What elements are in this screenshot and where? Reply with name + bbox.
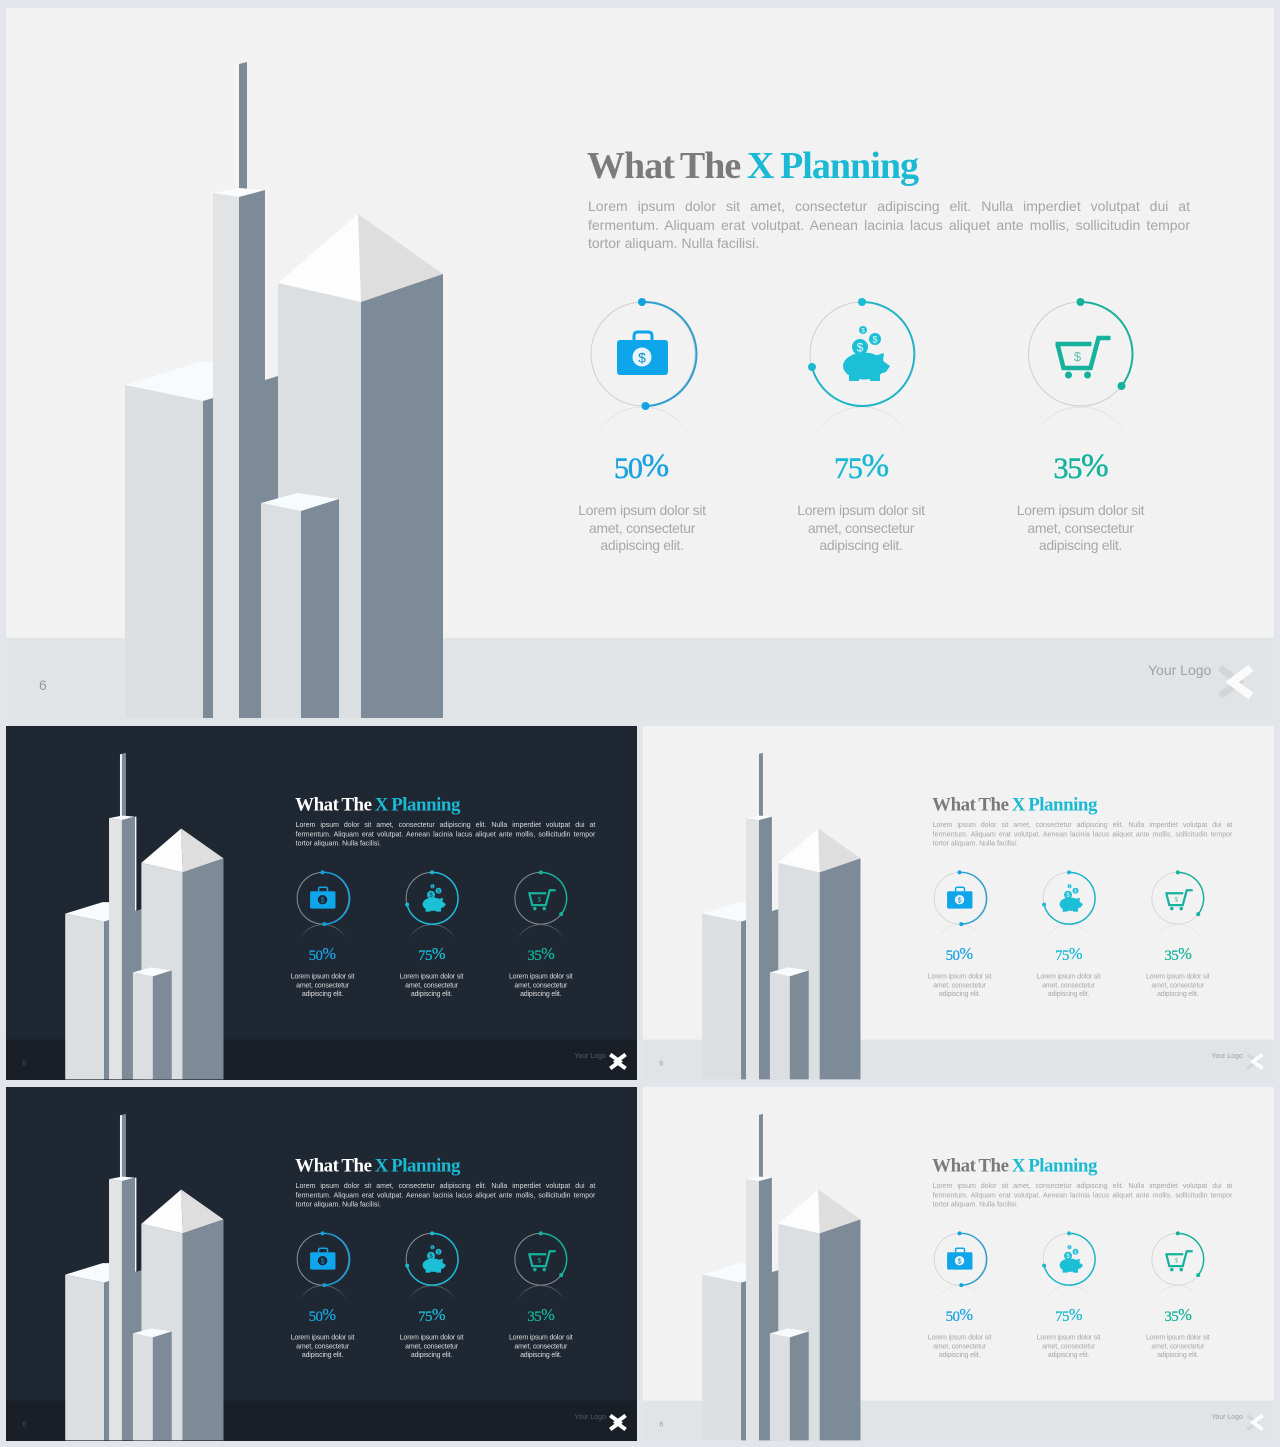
icon: piggy bank: $ [437, 1249, 440, 1254]
metric: 50% savings: 50% [309, 945, 335, 963]
metric: 35% savings: amet, consectetur [1151, 1342, 1204, 1350]
intro text: tortor aliquam. Nulla facilisi. [296, 1200, 381, 1208]
metric: 35% savings: amet, consectetur [1151, 981, 1204, 989]
metric: 75% savings: adipiscing elit. [1048, 1350, 1089, 1358]
icon: piggy bank [1060, 884, 1083, 912]
metric: 50% savings: amet, consectetur [296, 981, 349, 989]
icon: briefcase: $ [638, 350, 646, 366]
title: What The X Planning [932, 1155, 1097, 1176]
intro text [932, 821, 1232, 847]
illustration: skyscrapers [125, 62, 443, 718]
icon: shopping cart [1055, 338, 1110, 378]
page number: 6 [22, 1059, 26, 1067]
metric: 35% savings: amet, consectetur [514, 981, 567, 989]
logo text: Your Logo [1211, 1412, 1243, 1420]
metric: 75% savings: 75% [1055, 1306, 1082, 1324]
metric: 50% savings: adipiscing elit. [302, 1350, 343, 1358]
icon: shopping cart: $ [1174, 1258, 1178, 1265]
intro text [296, 821, 596, 847]
metric: 75% savings: adipiscing elit. [819, 537, 903, 553]
metric: 35% savings: adipiscing elit. [1039, 537, 1122, 553]
icon: piggy bank: $ [1069, 885, 1071, 889]
metric: 75% savings: 75% [1055, 945, 1082, 963]
page number: 6 [22, 1420, 26, 1428]
icon: briefcase: $ [321, 897, 325, 904]
icon: briefcase: $ [321, 1258, 325, 1265]
metric: 50% savings: amet, consectetur [296, 1342, 349, 1350]
logo mark [609, 1052, 627, 1070]
logo text: Your Logo [1211, 1051, 1243, 1059]
metric: 75% savings: amet, consectetur [1042, 981, 1095, 989]
intro text: tortor aliquam. Nulla facilisi. [933, 1200, 1018, 1208]
metric: 75% savings: adipiscing elit. [1048, 989, 1089, 997]
metric: 35% savings: amet, consectetur [1027, 520, 1134, 536]
metric: 75% savings [797, 298, 925, 553]
metric: 50% savings: amet, consectetur [933, 1342, 986, 1350]
icon: piggy bank: $ [1066, 1254, 1070, 1260]
icon: piggy bank: $ [857, 340, 864, 354]
metric: 50% savings: 50% [946, 1306, 972, 1324]
logo mark [1246, 1414, 1264, 1431]
metric: 75% savings [1037, 1231, 1100, 1358]
icon: piggy bank [423, 884, 446, 912]
intro text: fermentum. Aliquam erat volutpat. Aenean lacinia lacus aliquet ante mollis, sollicitudin tempor [933, 1191, 1232, 1199]
metric: 50% savings: adipiscing elit. [939, 989, 980, 997]
illustration: skyscrapers [65, 752, 224, 1080]
title: What The X Planning [932, 794, 1097, 815]
slide: small light top [643, 726, 1274, 1080]
icon: piggy bank [1060, 1245, 1083, 1273]
icon: shopping cart: $ [1073, 349, 1081, 364]
logo text: Your Logo [574, 1412, 606, 1420]
intro text: fermentum. Aliquam erat volutpat. Aenean lacinia lacus aliquet ante mollis, sollicitudin tempor [933, 830, 1232, 838]
metric: 75% savings: Lorem ipsum dolor sit [797, 502, 925, 518]
slide: small light bottom [643, 1087, 1274, 1441]
intro text [932, 1182, 1232, 1208]
icon: piggy bank: $ [437, 888, 440, 893]
intro text: tortor aliquam. Nulla facilisi. [296, 839, 381, 847]
intro text: Lorem ipsum dolor sit amet, consectetur adipiscing elit. Nulla imperdiet volutpat dui at [933, 821, 1232, 829]
icon: piggy bank: $ [1074, 1249, 1077, 1254]
metric: 75% savings: Lorem ipsum dolor sit [1037, 972, 1100, 980]
icon: shopping cart: $ [537, 897, 541, 904]
metric: 50% savings [578, 298, 706, 553]
logo text: Your Logo [574, 1051, 606, 1059]
metric: 35% savings: 35% [527, 945, 554, 963]
icon: briefcase [617, 332, 668, 375]
metric: 50% savings: amet, consectetur [933, 981, 986, 989]
metric: 35% savings [1146, 1231, 1210, 1358]
metric: 35% savings [509, 1231, 573, 1358]
slide: small dark top [6, 726, 637, 1080]
logo mark [1218, 665, 1254, 699]
metric: 35% savings: 35% [1164, 945, 1191, 963]
title: What The X Planning [295, 1155, 460, 1176]
metric: 75% savings: adipiscing elit. [411, 989, 452, 997]
metric: 50% savings: adipiscing elit. [302, 989, 343, 997]
metric: 50% savings: Lorem ipsum dolor sit [928, 972, 991, 980]
intro text: tortor aliquam. Nulla facilisi. [933, 839, 1018, 847]
intro text: Lorem ipsum dolor sit amet, consectetur adipiscing elit. Nulla imperdiet volutpat dui at [588, 198, 1190, 214]
intro text: Lorem ipsum dolor sit amet, consectetur adipiscing elit. Nulla imperdiet volutpat dui at [296, 821, 595, 829]
title: What The X Planning [295, 794, 460, 815]
logo text: Your Logo [1148, 662, 1211, 678]
icon: piggy bank [843, 326, 890, 381]
metric: 75% savings: Lorem ipsum dolor sit [400, 972, 463, 980]
intro text: Lorem ipsum dolor sit amet, consectetur adipiscing elit. Nulla imperdiet volutpat dui at [296, 1182, 595, 1190]
icon: piggy bank: $ [432, 1246, 434, 1250]
metric: 75% savings: amet, consectetur [405, 1342, 458, 1350]
metric: 35% savings: amet, consectetur [514, 1342, 567, 1350]
metric: 50% savings: amet, consectetur [589, 520, 695, 536]
icon: piggy bank: $ [872, 334, 878, 344]
icon: piggy bank: $ [1069, 1246, 1071, 1250]
metric: 75% savings [1037, 870, 1100, 998]
metric: 50% savings: Lorem ipsum dolor sit [291, 972, 354, 980]
illustration: skyscrapers [702, 752, 860, 1080]
metric: 75% savings: amet, consectetur [1042, 1342, 1095, 1350]
slide: small dark bottom [6, 1087, 637, 1441]
page number: 6 [659, 1059, 663, 1067]
metric: 75% savings: Lorem ipsum dolor sit [1037, 1333, 1100, 1341]
page number: 6 [659, 1420, 663, 1428]
slide: large light [6, 8, 1274, 720]
icon: piggy bank [423, 1245, 446, 1273]
metric: 35% savings: 35% [1164, 1306, 1191, 1324]
intro text [296, 1182, 596, 1208]
intro text: fermentum. Aliquam erat volutpat. Aenean lacinia lacus aliquet ante mollis, sollicitudin tempor [296, 1191, 595, 1199]
metric: 50% savings [291, 1231, 354, 1358]
metric: 50% savings: Lorem ipsum dolor sit [291, 1333, 354, 1341]
metric: 35% savings [1146, 870, 1210, 998]
icon: piggy bank: $ [1066, 893, 1070, 899]
logo mark [1246, 1053, 1264, 1070]
intro text: Lorem ipsum dolor sit amet, consectetur adipiscing elit. Nulla imperdiet volutpat dui at [933, 1182, 1232, 1190]
icon: piggy bank: $ [432, 885, 434, 889]
metric: 35% savings: adipiscing elit. [520, 989, 561, 997]
icon: briefcase: $ [958, 1258, 962, 1265]
metric: 75% savings: 75% [418, 945, 445, 963]
metric: 50% savings [291, 870, 354, 998]
icon: briefcase: $ [958, 897, 962, 904]
metric: 50% savings: 50% [309, 1306, 335, 1324]
metric: 75% savings [400, 870, 464, 998]
intro text: fermentum. Aliquam erat volutpat. Aenean lacinia lacus aliquet ante mollis, sollicitudin tempor [296, 830, 595, 838]
metric: 35% savings: adipiscing elit. [1157, 989, 1198, 997]
metric: 35% savings: Lorem ipsum dolor sit [1017, 502, 1144, 518]
metric: 35% savings: 35% [1054, 448, 1107, 485]
metric: 50% savings: Lorem ipsum dolor sit [928, 1333, 991, 1341]
metric: 35% savings: Lorem ipsum dolor sit [1146, 972, 1210, 980]
metric: 50% savings [928, 870, 992, 998]
metric: 50% savings: Lorem ipsum dolor sit [578, 502, 706, 518]
logo mark [609, 1414, 627, 1431]
icon: shopping cart: $ [1174, 897, 1178, 904]
metric: 35% savings: Lorem ipsum dolor sit [509, 972, 573, 980]
metric: 50% savings: adipiscing elit. [600, 537, 684, 553]
metric: 50% savings: 50% [614, 448, 668, 485]
metric: 75% savings: 75% [418, 1306, 445, 1324]
icon: piggy bank: $ [861, 328, 865, 334]
title: What The X Planning [587, 145, 918, 187]
metric: 50% savings: 50% [946, 945, 972, 963]
metric: 50% savings: adipiscing elit. [939, 1350, 980, 1358]
illustration: skyscrapers [702, 1114, 860, 1440]
intro text: tortor aliquam. Nulla facilisi. [588, 235, 759, 251]
metric: 35% savings [509, 870, 573, 998]
metric: 50% savings [928, 1231, 992, 1358]
intro text [588, 198, 1190, 251]
metric: 75% savings: Lorem ipsum dolor sit [400, 1333, 463, 1341]
intro text: fermentum. Aliquam erat volutpat. Aenean lacinia lacus aliquet ante mollis, sollicitudin tempor [588, 216, 1190, 232]
metric: 35% savings: Lorem ipsum dolor sit [1146, 1333, 1210, 1341]
metric: 75% savings: amet, consectetur [405, 981, 458, 989]
metric: 35% savings: 35% [527, 1306, 554, 1324]
icon: piggy bank: $ [1074, 888, 1077, 893]
illustration: skyscrapers [65, 1114, 224, 1440]
icon: piggy bank: $ [429, 1254, 433, 1260]
metric: 75% savings: amet, consectetur [808, 520, 914, 536]
metric: 75% savings: adipiscing elit. [411, 1350, 452, 1358]
metric: 35% savings: adipiscing elit. [520, 1350, 561, 1358]
metric: 35% savings: Lorem ipsum dolor sit [509, 1333, 573, 1341]
icon: piggy bank: $ [429, 893, 433, 899]
metric: 35% savings [1017, 298, 1144, 553]
metric: 35% savings: adipiscing elit. [1157, 1350, 1198, 1358]
metric: 75% savings: 75% [834, 448, 888, 485]
metric: 75% savings [400, 1231, 464, 1358]
icon: shopping cart: $ [537, 1258, 541, 1265]
page number: 6 [39, 677, 47, 693]
